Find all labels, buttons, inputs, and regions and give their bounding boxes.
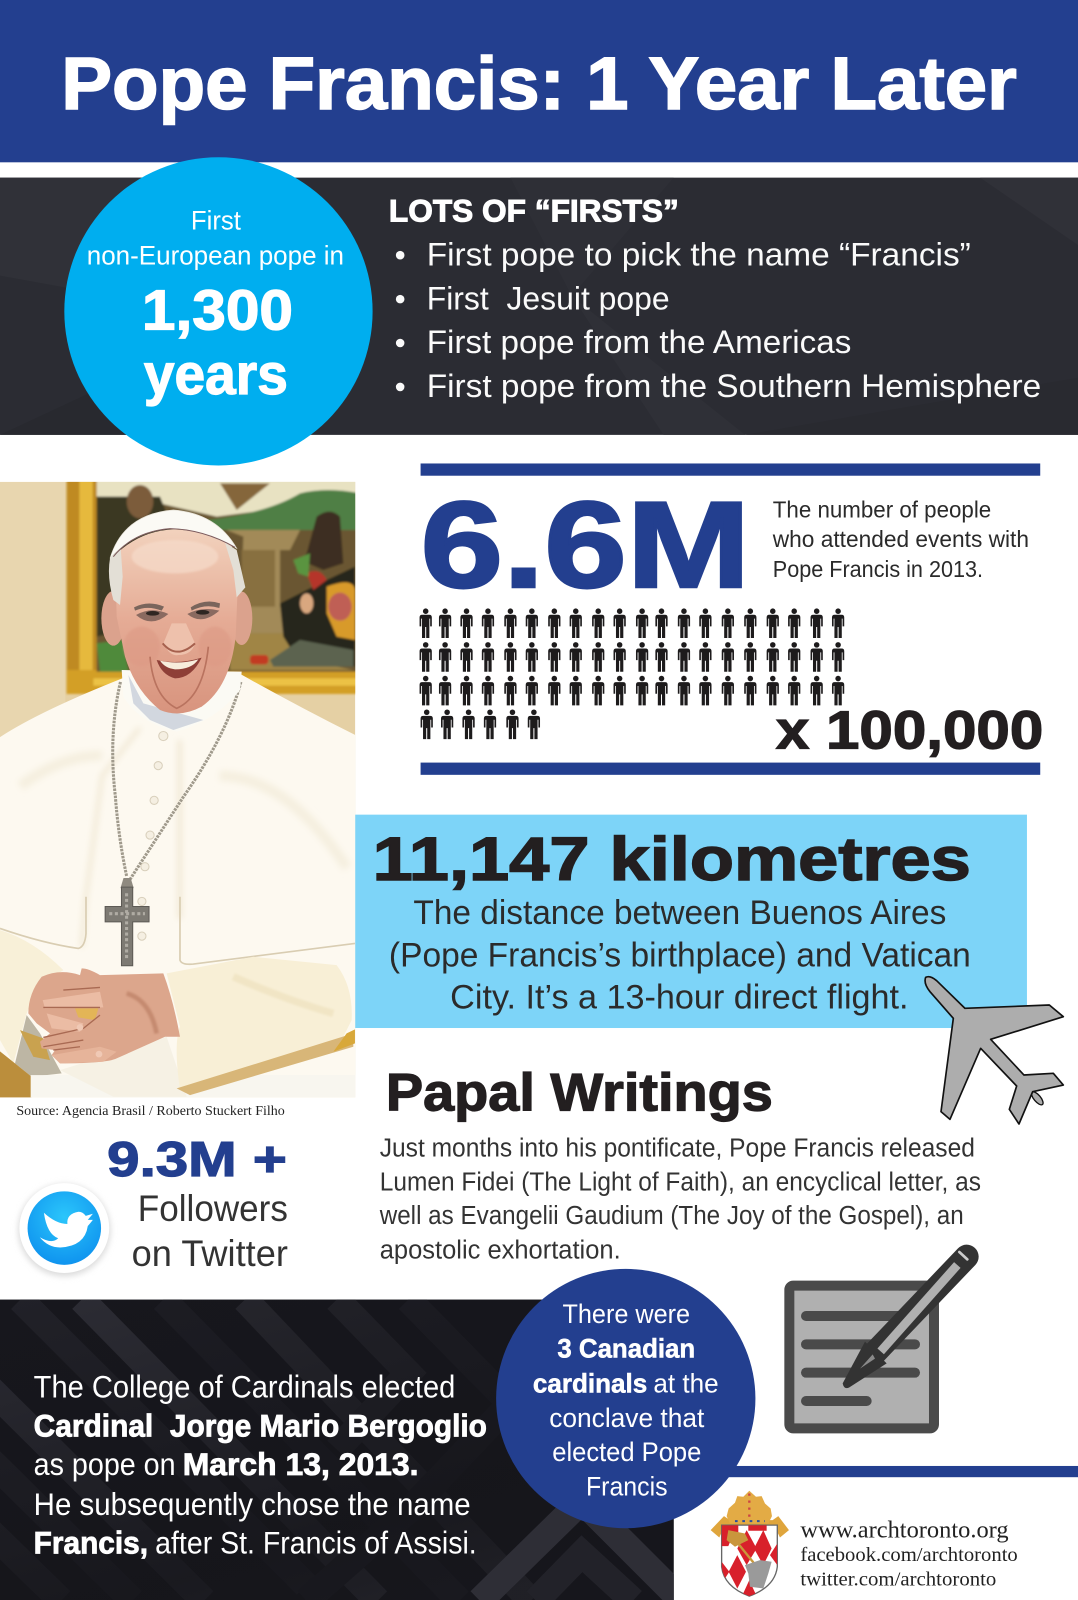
distance description: City. It’s a 13-hour direct flight. bbox=[450, 979, 909, 1017]
logo: archdiocese crest bbox=[711, 1491, 789, 1596]
callout: Canadian cardinals circle: Francis bbox=[586, 1472, 668, 1502]
callout: 1,300 years circle: years bbox=[144, 343, 288, 407]
stat: twitter followers: 9.3M + bbox=[107, 1133, 287, 1187]
footer links: www.archtoronto.org bbox=[800, 1516, 1009, 1543]
heading: lots of firsts: LOTS OF “FIRSTS” bbox=[389, 193, 679, 229]
distance description bbox=[389, 894, 971, 1017]
photo detail: head bbox=[101, 510, 252, 732]
attendance description: Pope Francis in 2013. bbox=[773, 556, 983, 582]
callout: Canadian cardinals circle: 3 Canadian bbox=[557, 1334, 695, 1364]
section: papal writings bbox=[379, 1064, 981, 1265]
election text bbox=[34, 1369, 487, 1561]
photo detail: gold frame and painting bbox=[67, 477, 360, 694]
attendance description: who attended events with bbox=[772, 526, 1029, 552]
stat: 6.6M attendance: 6.6M bbox=[421, 476, 750, 613]
bullet list: First Jesuit pope bbox=[427, 279, 670, 316]
callout: 1,300 years circle: First bbox=[191, 206, 242, 236]
election text: The College of Cardinals elected bbox=[34, 1369, 455, 1405]
photo source caption: Source: Agencia Brasil / Roberto Stuckert Filho bbox=[16, 1103, 285, 1118]
photo: Pope Francis bbox=[0, 477, 360, 1098]
election text: Francis, bbox=[34, 1525, 148, 1561]
multiplier label: x 100,000 bbox=[776, 700, 1043, 760]
callout: Canadian cardinals circle: There were bbox=[562, 1299, 690, 1329]
election text: after St. Francis of Assisi. bbox=[155, 1525, 477, 1561]
icon: twitter bird bbox=[18, 1183, 110, 1276]
callout: 1,300 years circle bbox=[64, 157, 373, 466]
panel: lots of firsts bbox=[0, 178, 1078, 435]
icon: document and pencil bbox=[789, 1252, 967, 1428]
callout: 1,300 years circle: 1,300 bbox=[142, 279, 293, 342]
bullet list: First pope from the Southern Hemisphere bbox=[427, 367, 1041, 404]
pictogram: people icons bbox=[420, 608, 844, 739]
panel: election facts bbox=[0, 1300, 694, 1600]
stat: twitter followers bbox=[18, 1133, 288, 1276]
distance description: (Pope Francis’s birthplace) and Vatican bbox=[389, 937, 971, 975]
election text: as pope on bbox=[34, 1446, 176, 1482]
papal writings paragraph: well as Evangelii Gaudium (The Joy of the Gospel), an bbox=[379, 1202, 964, 1230]
photo detail: chain and cross bbox=[105, 682, 241, 966]
photo detail: cape edges bbox=[0, 897, 355, 964]
distance heading: 11,147 kilometres bbox=[373, 825, 971, 893]
callout: Canadian cardinals circle: at the bbox=[653, 1368, 719, 1398]
stat: twitter followers: Followers bbox=[138, 1188, 288, 1229]
callout: Canadian cardinals circle: cardinals bbox=[533, 1368, 647, 1398]
photo detail: sleeves and hands bbox=[0, 897, 356, 1098]
divider bar: footer bbox=[715, 1466, 1078, 1477]
callout: Canadian cardinals circle bbox=[496, 1269, 755, 1528]
footer links: facebook.com/archtoronto bbox=[800, 1544, 1018, 1566]
papal writings paragraph: apostolic exhortation. bbox=[380, 1237, 621, 1265]
panel: distance bbox=[355, 815, 1027, 1028]
election text: He subsequently chose the name bbox=[34, 1486, 471, 1522]
attendance description: The number of people bbox=[773, 497, 991, 523]
title: Pope Francis: 1 Year Later bbox=[61, 42, 1017, 125]
bullet list: First pope from the Americas bbox=[427, 323, 851, 360]
header banner bbox=[0, 0, 1078, 162]
icon: airplane bbox=[925, 977, 1063, 1124]
distance description: The distance between Buenos Aires bbox=[413, 894, 946, 932]
election text: Cardinal Jorge Mario Bergoglio bbox=[34, 1407, 487, 1443]
stat: 6.6M attendance bbox=[420, 463, 1043, 775]
photo detail: white robe bbox=[0, 674, 355, 1097]
papal writings paragraph bbox=[379, 1135, 981, 1265]
footer links bbox=[800, 1516, 1018, 1590]
election text: March 13, 2013. bbox=[183, 1446, 419, 1482]
papal writings paragraph: Lumen Fidei (The Light of Faith), an encyclical letter, as bbox=[380, 1168, 981, 1196]
callout: Canadian cardinals circle: conclave that bbox=[549, 1403, 705, 1433]
section: papal writings: Papal Writings bbox=[386, 1064, 773, 1123]
attendance description bbox=[772, 497, 1029, 582]
papal writings paragraph: Just months into his pontificate, Pope Francis released bbox=[380, 1135, 975, 1163]
bullet list: First pope to pick the name “Francis” bbox=[427, 235, 971, 272]
callout: Canadian cardinals circle: elected Pope bbox=[552, 1437, 701, 1467]
stat: twitter followers: on Twitter bbox=[132, 1233, 288, 1274]
bullet list bbox=[396, 235, 1041, 404]
callout: 1,300 years circle: non-European pope in bbox=[87, 240, 344, 270]
footer links: twitter.com/archtoronto bbox=[800, 1568, 996, 1590]
